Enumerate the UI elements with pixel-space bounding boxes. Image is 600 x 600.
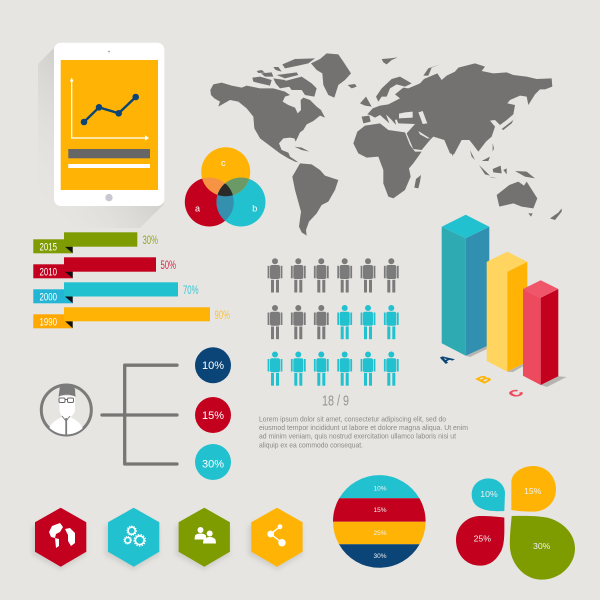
inland seas of the map [399,111,430,138]
bar 2015: 30% [142,235,158,247]
bar C [523,280,566,387]
bar 1990: 90% [214,310,230,322]
petal 10%: 10% [480,489,498,499]
hexagon: gears [105,508,159,570]
bar 2015: 2015 [40,242,57,254]
bar 2000 [33,282,198,304]
ratio label: 18 / 9 [322,392,349,410]
tablet with line chart [38,43,164,228]
axis letter A: A [434,353,457,365]
people pictogram [268,258,399,386]
lorem paragraph: ad minim veniam, quis nostrud exercitation ullamco laboris nisi ut [259,433,456,441]
petal 30%: 30% [533,541,551,551]
hexagon: share [248,508,303,570]
percent circles [195,347,231,480]
bar B [487,252,527,372]
bar 2010: 2010 [40,267,57,279]
grey people [268,258,399,339]
timeline bars [33,232,230,329]
striped pie circle [333,475,426,568]
bar A [442,215,489,357]
americas and arctic [210,53,357,236]
axis letter B: B [472,373,495,385]
eurasia africa oceania [353,57,562,220]
bar 2015 [33,232,158,254]
lorem paragraph [259,416,468,449]
striped pie circle: 15% [373,507,387,514]
lorem paragraph: Lorem ipsum dolor sit amet, consectetur adipiscing elit, sed do [259,416,446,424]
venn diagram: a [195,204,200,214]
bar 2010: 50% [160,260,176,272]
connector tree [102,365,177,464]
petal 25%: 25% [474,534,491,544]
circle 15%: 15% [202,410,224,422]
hexagon icons [32,508,303,570]
hexagon: users [176,508,230,570]
striped pie circle: 25% [373,530,387,537]
circle 30%: 30% [202,458,224,470]
bar 2000: 70% [183,285,198,297]
3D bar chart [434,215,566,399]
bar 2000: 2000 [40,292,57,304]
striped pie circle: 30% [373,553,387,560]
petal 15%: 15% [524,486,542,496]
venn diagram [185,147,266,226]
bar 2010 [33,257,176,279]
avatar [41,385,91,436]
axis letter C: C [504,387,527,399]
teal people [268,305,399,386]
venn diagram: b [252,204,257,214]
circle 10%: 10% [202,360,224,372]
hexagon: globe [32,508,86,570]
striped pie circle: 10% [373,486,387,492]
lorem paragraph: eiusmod tempor incididunt ut labore et dolore magna aliqua. Ut enim [259,424,468,432]
world map [210,53,562,236]
petal chart [456,466,575,580]
lorem paragraph: aliquip ex ea commodo consequat. [259,441,363,449]
bar 1990: 1990 [40,317,57,329]
bar 1990 [33,307,230,329]
venn diagram: c [221,158,226,168]
